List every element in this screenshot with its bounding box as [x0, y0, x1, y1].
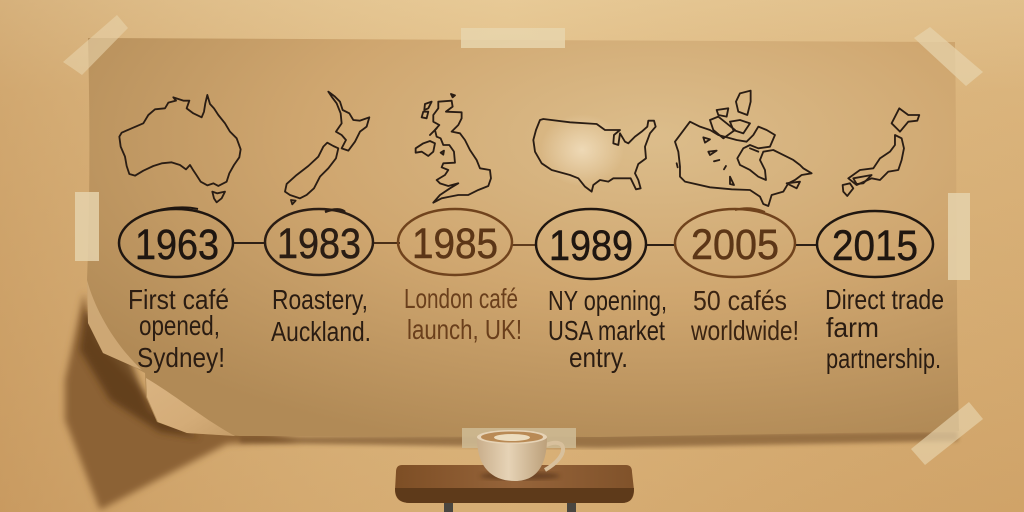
- caption 1989: entry.: [569, 342, 628, 373]
- milestone 1985: 1985: [412, 220, 498, 268]
- timeline connector line: [233, 243, 818, 245]
- caption 1989: USA market: [548, 315, 665, 346]
- caption 2015: partnership.: [826, 343, 941, 374]
- caption 2005: worldwide!: [690, 315, 799, 346]
- tape: top left: [63, 15, 128, 75]
- milestone 1983: 1983: [277, 220, 361, 268]
- map: Japan: [843, 108, 919, 196]
- milestone 1963: 1963: [135, 221, 219, 269]
- milestone 1985: [398, 209, 512, 275]
- caption 1963: Sydney!: [137, 342, 225, 373]
- caption 1983: Auckland.: [271, 316, 371, 347]
- milestone 2015: 2015: [832, 222, 918, 270]
- milestone 1989: [536, 209, 646, 279]
- caption 1963: [128, 284, 229, 373]
- milestone 2005: [675, 208, 795, 277]
- caption 1963: First café: [128, 284, 229, 315]
- caption 1963: opened,: [139, 310, 220, 341]
- tape: top right: [914, 27, 983, 86]
- caption 1985: London café: [404, 283, 518, 314]
- caption 2015: [825, 284, 944, 374]
- caption 1983: [271, 284, 371, 347]
- tape: right: [948, 193, 970, 280]
- map: New Zealand: [285, 92, 369, 204]
- caption 1985: [404, 283, 522, 345]
- paper curl highlight: [146, 378, 235, 436]
- tape: left: [75, 192, 99, 261]
- caption 1983: Roastery,: [272, 284, 368, 315]
- coffee cup: [477, 430, 563, 481]
- tape: top center: [461, 28, 565, 48]
- milestone 1963: [119, 207, 233, 277]
- map: United Kingdom: [416, 94, 491, 203]
- paper shadow: [65, 293, 958, 510]
- caption 1985: launch, UK!: [407, 314, 522, 345]
- upper curl highlight: [87, 280, 142, 370]
- caption 2015: Direct trade: [825, 284, 944, 315]
- wooden shelf: [395, 465, 634, 512]
- caption 2015: farm: [826, 312, 879, 343]
- kraft paper sheet: [87, 38, 959, 437]
- caption 2005: 50 cafés: [693, 285, 787, 316]
- milestone 1983: [265, 209, 373, 275]
- tape: bottom center: [462, 428, 576, 448]
- map: Canada: [675, 91, 812, 206]
- caption 1989: [548, 285, 667, 373]
- caption 2005: [690, 285, 799, 346]
- map: USA: [533, 119, 656, 192]
- milestone 2015: [817, 211, 933, 277]
- tape: bottom right: [911, 402, 983, 465]
- caption 1989: NY opening,: [548, 285, 667, 316]
- milestone 2005: 2005: [691, 221, 779, 269]
- map: Australia: [119, 95, 241, 202]
- milestone 1989: 1989: [549, 222, 633, 270]
- light reflection: [540, 114, 624, 186]
